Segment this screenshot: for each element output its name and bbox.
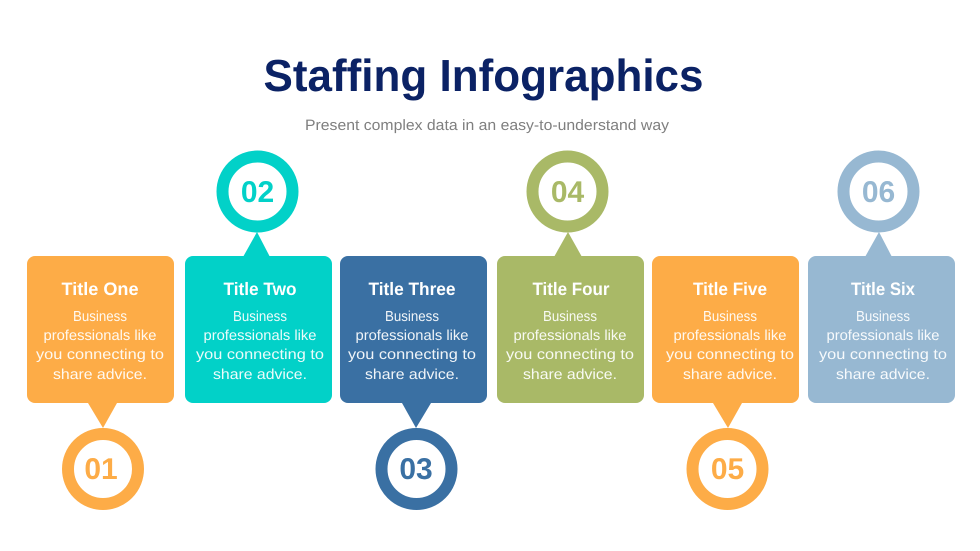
card: step 04 [497, 256, 644, 403]
pointer: step 03 [402, 403, 431, 428]
heading: Title Four: Title Four [532, 279, 610, 299]
badge: 04 [532, 156, 602, 226]
panel: step 03 [340, 256, 487, 504]
badge: 01: 01 [84, 453, 118, 486]
badge: 01 [68, 434, 138, 504]
card: step 05 [652, 256, 799, 403]
panel: step 02 [185, 156, 332, 403]
badge: 06 [844, 156, 914, 226]
text: step 06 description [819, 309, 947, 383]
text: step 06 description: you connecting to [819, 347, 947, 363]
card: step 01 [27, 256, 174, 403]
panel: step 01 [27, 256, 174, 504]
text: step 06 description: share advice. [836, 367, 930, 383]
panel: step 04 [497, 156, 644, 403]
badge: 05: 05 [711, 453, 744, 486]
text: step 05 description: share advice. [683, 367, 777, 383]
card: step 03 [340, 256, 487, 403]
text: step 03 description: share advice. [365, 367, 459, 383]
text: step 03 description: professionals like [356, 328, 468, 344]
text: step 01 description: share advice. [53, 367, 147, 383]
pointer: step 04 [554, 232, 582, 257]
text: step 06 description: Business [856, 309, 910, 325]
text: step 04 description: you connecting to [506, 347, 634, 363]
badge: 04: 04 [551, 176, 584, 209]
text: step 03 description: Business [385, 309, 439, 325]
heading: Title Three: Title Three [368, 279, 456, 299]
text: step 02 description: Business [233, 309, 287, 325]
text: step 05 description: you connecting to [666, 347, 794, 363]
text: step 04 description: share advice. [523, 367, 617, 383]
text: step 01 description: Business [73, 309, 127, 325]
text: step 02 description: share advice. [213, 367, 307, 383]
title: Staffing Infographics [264, 50, 704, 101]
text: step 02 description: professionals like [204, 328, 316, 344]
heading: Title One: Title One [62, 279, 138, 299]
heading: Title Two: Title Two [224, 279, 296, 299]
text: step 04 description: Business [543, 309, 597, 325]
text: step 02 description [196, 309, 324, 383]
text: step 02 description: you connecting to [196, 347, 324, 363]
text: step 05 description: Business [703, 309, 757, 325]
subtitle: Present complex data in an easy-to-understand way [305, 117, 670, 134]
heading: Title Six: Title Six [851, 279, 915, 299]
text: step 03 description [348, 309, 476, 383]
badge: 02: 02 [241, 176, 274, 209]
panel: step 06 [808, 156, 955, 403]
pointer: step 06 [865, 232, 892, 257]
heading: Title Five: Title Five [693, 279, 767, 299]
text: step 06 description: professionals like [826, 328, 940, 344]
card: step 02 [185, 256, 332, 403]
text: step 01 description: you connecting to [36, 347, 164, 363]
text: step 05 description: professionals like [674, 328, 786, 344]
text: step 04 description: professionals like [514, 328, 626, 344]
text: step 04 description [506, 309, 634, 383]
text: step 01 description [36, 309, 164, 383]
text: step 03 description: you connecting to [348, 347, 476, 363]
panel: step 05 [652, 256, 799, 504]
card: step 06 [808, 256, 955, 403]
pointer: step 01 [88, 403, 117, 428]
text: step 05 description [666, 309, 794, 383]
badge: 03: 03 [399, 453, 433, 486]
badge: 02 [222, 156, 292, 226]
badge: 05 [692, 434, 762, 504]
pointer: step 02 [243, 232, 270, 257]
text: step 01 description: professionals like [44, 328, 156, 344]
badge: 03 [382, 434, 452, 504]
badge: 06: 06 [862, 176, 895, 209]
pointer: step 05 [713, 403, 742, 428]
